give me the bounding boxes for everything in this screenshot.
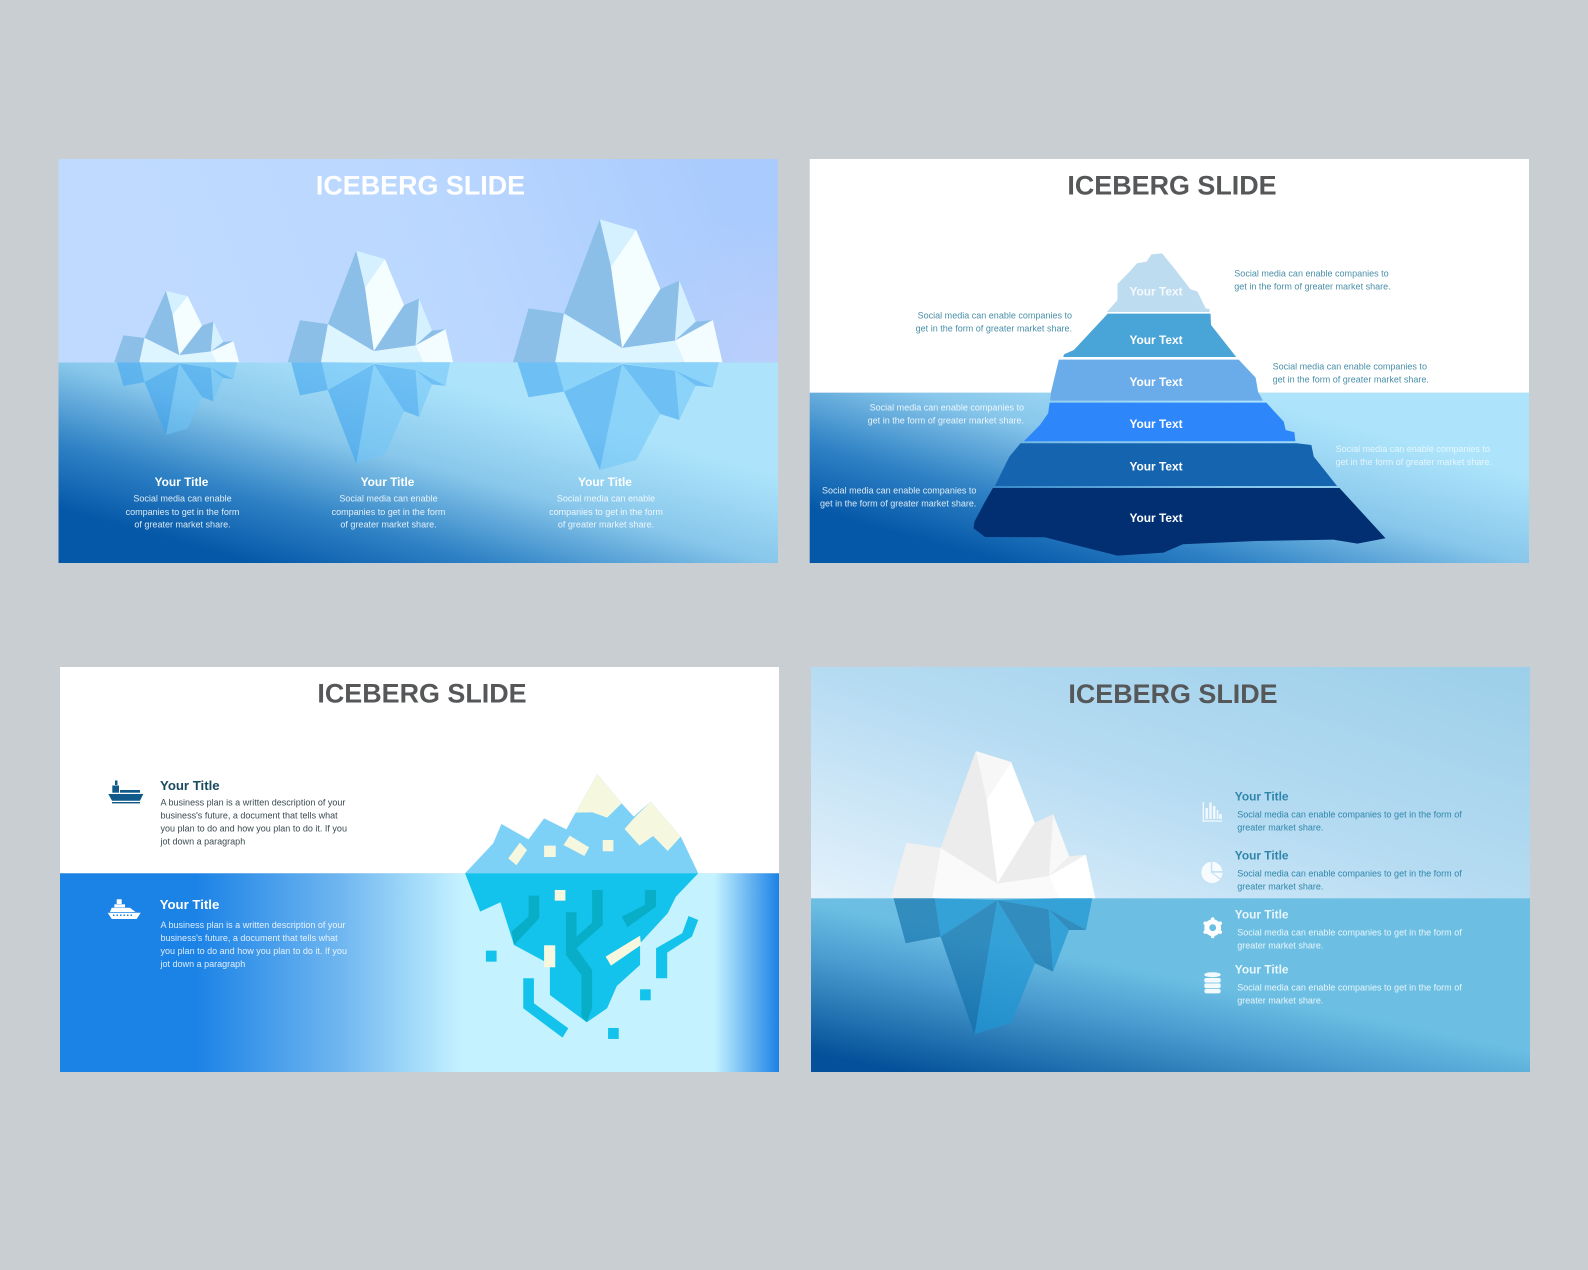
- text block: below water: Your Title: [160, 897, 219, 912]
- sky: [810, 159, 1529, 393]
- callout: right 3: Social media can enable companies to: [1336, 444, 1490, 454]
- callout: right 2: [1273, 362, 1429, 385]
- list item 3: Your Title: [1235, 907, 1289, 921]
- title: ICEBERG SLIDE: [1067, 170, 1277, 200]
- callout: left 1: get in the form of greater market share.: [916, 324, 1072, 334]
- callout: left 2: [868, 403, 1024, 426]
- text block: below water: you plan to do and how you plan to do it. If you: [160, 946, 347, 956]
- list item 2: greater market share.: [1237, 881, 1323, 891]
- text block: first: of greater market share.: [134, 520, 231, 530]
- iceberg: small: [114, 291, 239, 362]
- text block: above water: A business plan is a written description of your: [160, 798, 345, 808]
- sea: [811, 898, 1530, 1072]
- callout: left 1: [916, 311, 1072, 334]
- list item 4: Your Title: [1235, 962, 1289, 976]
- list item 1: greater market share.: [1237, 823, 1323, 833]
- callout: left 3: Social media can enable companies to: [822, 485, 976, 495]
- text block: second: Social media can enable: [339, 494, 438, 504]
- list item 3: Social media can enable companies to get in the form of: [1237, 928, 1462, 938]
- sea: [58, 362, 778, 563]
- callout: left 3: [820, 485, 976, 508]
- text block: below water: A business plan is a written description of your: [160, 920, 345, 930]
- list item 2: Your Title: [1235, 848, 1289, 862]
- white iceberg: [891, 751, 1095, 1034]
- callout: right 3: [1336, 444, 1492, 467]
- embedded ice: [544, 890, 641, 967]
- text block: second: of greater market share.: [340, 520, 437, 530]
- tier labels: Your Text: [1129, 375, 1183, 389]
- tier 1: [1107, 253, 1210, 312]
- tier labels: Your Text: [1129, 417, 1183, 431]
- text block: first: companies to get in the form: [126, 507, 239, 517]
- list item 1: Social media can enable companies to get in the form of: [1237, 810, 1462, 820]
- callout: left 3: get in the form of greater market share.: [820, 498, 976, 508]
- tier labels: Your Text: [1129, 511, 1183, 525]
- text block: third: of greater market share.: [558, 520, 654, 530]
- panel: flat iceberg: [60, 667, 779, 1072]
- icebergs: [114, 219, 722, 470]
- text block: above water: jot down a paragraph: [160, 837, 245, 847]
- panel: layered iceberg pyramid: [810, 159, 1529, 563]
- title: ICEBERG SLIDE: [316, 170, 525, 200]
- iceberg: large: [513, 219, 722, 362]
- text block: first: [126, 475, 239, 530]
- text block: above water: Your Title: [160, 778, 220, 793]
- tier 6: [974, 488, 1386, 556]
- list item 3: [1235, 907, 1462, 951]
- list item 2: Social media can enable companies to get in the form of: [1237, 868, 1462, 878]
- iceberg reflection: medium: [291, 362, 450, 464]
- floating fragments: [486, 916, 698, 1039]
- callout: right 2: Social media can enable companies to: [1273, 362, 1427, 372]
- panel: three icebergs: [58, 159, 778, 563]
- tier 5: [995, 443, 1337, 486]
- list item 1: [1235, 789, 1462, 833]
- iceberg reflection: large: [517, 362, 719, 470]
- text block: second: companies to get in the form: [332, 507, 445, 517]
- tier labels: [1129, 285, 1183, 525]
- list item 1: Your Title: [1235, 789, 1289, 803]
- panel: white iceberg with list: [811, 667, 1530, 1072]
- sea: [810, 393, 1529, 563]
- layered iceberg: [974, 253, 1386, 556]
- list item 4: [1235, 962, 1462, 1006]
- list item 4: greater market share.: [1237, 996, 1323, 1006]
- icon: database: [1204, 972, 1221, 993]
- text block: second: [332, 475, 445, 530]
- tier labels: Your Text: [1129, 285, 1183, 299]
- tier labels: Your Text: [1129, 333, 1183, 347]
- callout: right 3: get in the form of greater market share.: [1336, 457, 1492, 467]
- iceberg: medium: [288, 251, 453, 362]
- list item 4: Social media can enable companies to get in the form of: [1237, 983, 1462, 993]
- flat iceberg illustration: [465, 774, 698, 1039]
- text block: third: Social media can enable: [557, 494, 655, 504]
- text block: third: [549, 475, 663, 530]
- title: ICEBERG SLIDE: [317, 679, 527, 709]
- list item 2: [1235, 848, 1462, 891]
- iceberg below water: [894, 898, 1092, 1034]
- list item 3: greater market share.: [1237, 941, 1323, 951]
- text block: third: Your Title: [578, 475, 632, 489]
- icon: pie chart: [1201, 862, 1222, 883]
- text block: above water: business's future, a document that tells what: [160, 811, 338, 821]
- icon: cruise ship: [108, 899, 141, 919]
- iceberg top: [465, 774, 698, 873]
- icon: cargo ship: [108, 780, 143, 803]
- icon: bar chart: [1203, 802, 1222, 822]
- callout: left 2: Social media can enable companies to: [870, 403, 1024, 413]
- tier 3: [1050, 360, 1263, 401]
- text block: above water: [160, 778, 347, 847]
- tier 4: [1024, 403, 1295, 441]
- text block: first: Your Title: [155, 475, 209, 489]
- snow caps: [508, 774, 681, 865]
- sea: [60, 873, 779, 1072]
- sky tint: [58, 159, 778, 362]
- callout: right 1: Social media can enable companies to: [1234, 269, 1389, 279]
- iceberg reflection: small: [117, 362, 237, 435]
- sky: [58, 159, 778, 362]
- callout: right 1: get in the form of greater market share.: [1234, 282, 1391, 292]
- crevices: [512, 890, 656, 1022]
- text block: below water: jot down a paragraph: [160, 959, 245, 969]
- sky: [811, 667, 1530, 898]
- sky: [60, 667, 779, 873]
- callout: left 1: Social media can enable companies to: [918, 311, 1072, 321]
- callout: right 2: get in the form of greater market share.: [1273, 375, 1429, 385]
- callout: right 1: [1234, 269, 1391, 292]
- icon: gear: [1204, 919, 1221, 936]
- iceberg underwater: [465, 873, 698, 1022]
- callout: left 2: get in the form of greater market share.: [868, 416, 1024, 426]
- text block: second: Your Title: [361, 475, 415, 489]
- text block: third: companies to get in the form: [549, 507, 663, 517]
- title: ICEBERG SLIDE: [1068, 679, 1278, 709]
- text block: below water: [160, 897, 347, 969]
- tier 2: [1063, 314, 1236, 357]
- text block: below water: business's future, a document that tells what: [160, 933, 338, 943]
- text block: first: Social media can enable: [133, 494, 232, 504]
- text block: above water: you plan to do and how you plan to do it. If you: [160, 824, 347, 834]
- iceberg above water: [891, 751, 1095, 898]
- tier labels: Your Text: [1129, 460, 1183, 474]
